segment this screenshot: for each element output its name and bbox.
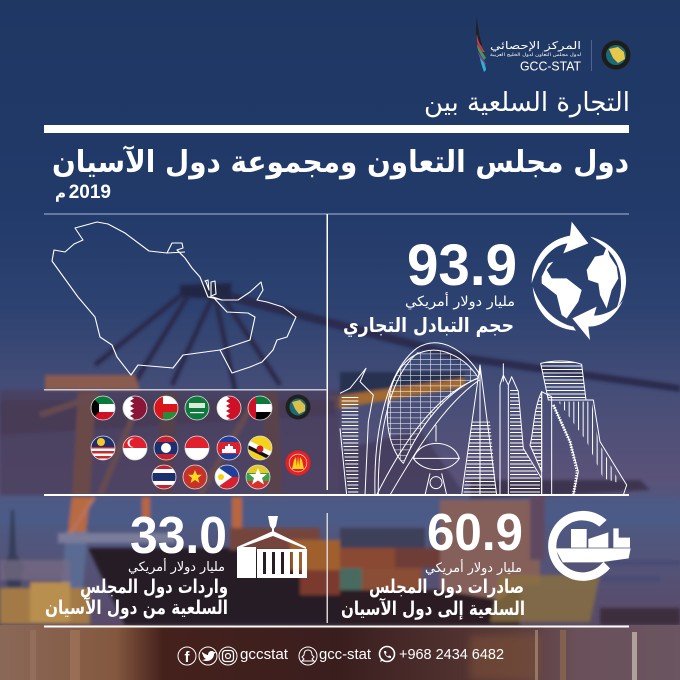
- stat label: صادرات دول المجلس: [369, 576, 524, 598]
- logo: GCC-STAT: لدول مجلس التعاون لدول الخليج العربية: [490, 53, 581, 58]
- flag: Philippines: [215, 465, 239, 489]
- stat value: 33.0: [130, 507, 227, 565]
- flag: Singapore: [123, 436, 147, 460]
- ship hull and containers: [88, 495, 680, 625]
- handle: gcc-stat: [319, 647, 371, 663]
- icon: globe with arrows: [532, 222, 626, 340]
- map: GCC countries outline: [52, 222, 296, 375]
- flag: Brunei: [248, 436, 272, 461]
- icon: GCC emblem: [602, 40, 630, 70]
- icon: ship in circular arrow: [548, 511, 631, 581]
- phone: +968 2434 6482: [399, 647, 504, 663]
- flag: Vietnam: [183, 465, 207, 489]
- flag: Kuwait: [91, 396, 115, 420]
- icon: twitter: [199, 647, 217, 665]
- stat label: السلعية إلى دول الآسيان: [341, 597, 525, 620]
- tower: left: [340, 368, 373, 495]
- flag: Oman: [154, 396, 178, 420]
- stat unit: مليار دولار أمريكي: [405, 292, 515, 310]
- left crane and tower: [0, 497, 242, 624]
- flag: Saudi Arabia: [185, 396, 209, 420]
- tower: twisted right: [541, 361, 627, 495]
- flag: Bahrain: [217, 396, 241, 420]
- sky streaks right: [600, 560, 680, 582]
- logo: GCC-STAT: [476, 17, 630, 74]
- tower: sail: [530, 392, 552, 495]
- flag: Qatar: [123, 396, 147, 420]
- icon: facebook: [178, 647, 196, 666]
- icon: ribbon: [476, 17, 486, 72]
- dock horizon: [0, 497, 680, 525]
- tower: Bahrain WTC: [462, 365, 497, 495]
- stat unit: مليار دولار أمريكي: [128, 558, 225, 575]
- panel: total trade: [343, 222, 626, 340]
- crane legs: [0, 390, 650, 500]
- icon: ASEAN emblem: [286, 450, 310, 476]
- crane booms: [0, 283, 680, 435]
- logo text: المركز الإحصائي: [490, 40, 581, 52]
- flag: Cambodia: [217, 436, 241, 460]
- footer: contact row: [178, 646, 504, 666]
- stat label: [45, 576, 228, 619]
- icon: container on hook: [237, 516, 307, 578]
- tower: Oman dome: [413, 425, 459, 495]
- stat label: [341, 576, 525, 620]
- stat label: حجم التبادل التجاري: [343, 313, 514, 338]
- panel: exports: [341, 504, 631, 620]
- stat value: 93.9: [407, 233, 517, 298]
- flag: Indonesia: [185, 436, 209, 460]
- flag: Malaysia: [91, 436, 115, 460]
- stat label: السلعية من دول الآسيان: [45, 596, 228, 619]
- tower: tall: [500, 363, 542, 495]
- stat label: واردات دول المجلس: [80, 576, 228, 598]
- year suffix: م: [55, 184, 66, 202]
- heading bar: [44, 125, 629, 133]
- layout rules: [44, 214, 629, 628]
- logo: GCC-STAT: GCC-STAT: [520, 60, 581, 74]
- flag: Myanmar: [246, 465, 270, 489]
- icon: snapchat: [299, 647, 317, 665]
- panel: imports: [45, 507, 307, 619]
- title: دول مجلس التعاون ومجموعة دول الآسيان: [52, 145, 629, 180]
- handle: gccstat: [240, 647, 288, 663]
- flag: UAE: [248, 396, 272, 420]
- flag: Thailand: [152, 465, 176, 489]
- year: 2019: [69, 182, 111, 203]
- icon: facebook: f: [184, 649, 190, 666]
- flag: Laos: [154, 436, 178, 460]
- icon: instagram: [219, 647, 237, 665]
- flags: ASEAN: [91, 436, 310, 489]
- illustration: skyline: [340, 343, 627, 495]
- dome building: [375, 343, 480, 495]
- heading: subtitle: التجارة السلعية بين: [424, 88, 630, 118]
- water: [0, 625, 680, 680]
- icon: whatsapp: [380, 646, 394, 662]
- flags: GCC row: [91, 394, 310, 420]
- stat unit: مليار دولار أمريكي: [425, 559, 522, 576]
- icon: GCC emblem small: [286, 394, 310, 420]
- stat value: 60.9: [427, 504, 523, 562]
